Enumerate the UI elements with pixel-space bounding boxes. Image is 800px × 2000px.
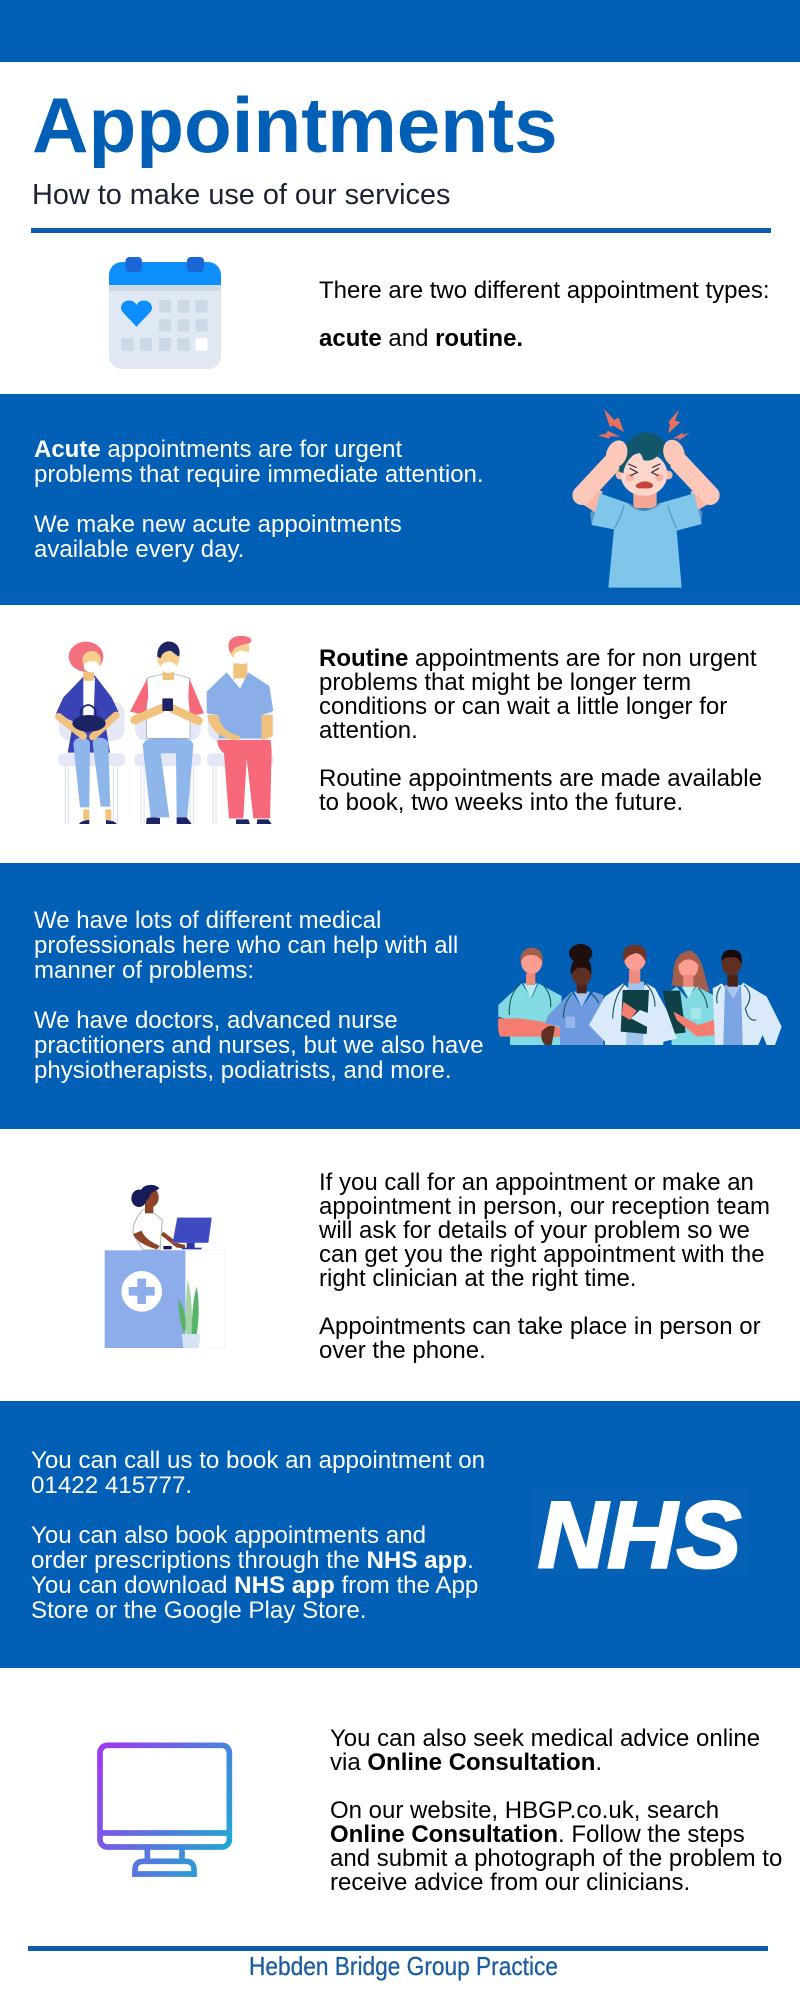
text: routine description: problems that might be longer term xyxy=(319,668,691,696)
top banner xyxy=(0,0,800,62)
subtitle: How to make use of our services xyxy=(32,178,450,210)
text: acute description: problems that require immediate attention. xyxy=(34,460,484,488)
text: routine description xyxy=(319,644,762,816)
text: reception description: over the phone. xyxy=(319,1337,486,1364)
text: online consultation description: receive advice from our clinicians. xyxy=(330,1869,690,1896)
text: booking details: 01422 415777. xyxy=(31,1472,192,1498)
panel: appointment types intro xyxy=(109,257,769,369)
text: online consultation description: via Online Consultation. xyxy=(330,1749,602,1776)
text: booking details: You can also book appointments and xyxy=(31,1522,426,1548)
text: online consultation description: Online Consultation. Follow the steps xyxy=(330,1821,745,1848)
text: staff description xyxy=(34,906,484,1084)
panel: title header xyxy=(31,81,771,233)
text: staff description: manner of problems: xyxy=(34,956,254,984)
panel: online consultation xyxy=(97,1725,782,1896)
text: acute description: Acute appointments are for urgent xyxy=(34,436,402,462)
title: Appointments xyxy=(32,81,558,169)
text: two appointment types xyxy=(319,277,769,352)
figure: man in blue scrubs xyxy=(207,636,273,824)
footer rule xyxy=(28,1946,768,1951)
illustration: five clinicians xyxy=(498,944,782,1045)
figure: nurse with crossed arms xyxy=(498,948,562,1045)
text: online consultation description: On our website, HBGP.co.uk, search xyxy=(330,1797,719,1824)
text: routine description: conditions or can wait a little longer for xyxy=(319,692,727,720)
figure: woman with long hair xyxy=(663,951,719,1045)
text: staff description: We have lots of different medical xyxy=(34,906,381,934)
text: two appointment types: acute and routine. xyxy=(319,325,523,352)
figure: man with phone xyxy=(130,642,204,824)
text: booking details xyxy=(31,1446,485,1624)
text: booking details: order prescriptions through the NHS app. xyxy=(31,1546,474,1574)
text: staff description: professionals here who can help with all xyxy=(34,932,458,958)
panel: reception team xyxy=(104,1169,770,1364)
icon: calendar with heart xyxy=(109,257,221,369)
illustration: person with headache xyxy=(572,409,720,588)
text: routine description: attention. xyxy=(319,716,418,744)
text: booking details: You can call us to book an appointment on xyxy=(31,1446,485,1474)
figure: woman with bag xyxy=(56,642,118,824)
panel: medical professionals xyxy=(0,863,800,1129)
text: online consultation description xyxy=(330,1725,782,1896)
panel: booking by phone and NHS app xyxy=(0,1401,800,1668)
panel: routine appointments xyxy=(55,636,762,824)
text: booking details: Store or the Google Play Store. xyxy=(31,1596,366,1624)
text: reception description: right clinician at the right time. xyxy=(319,1265,636,1292)
text: reception description: Appointments can take place in person or xyxy=(319,1313,761,1340)
footer xyxy=(28,1946,768,1981)
panel: acute appointments xyxy=(0,394,800,605)
text: staff description: We have doctors, advanced nurse xyxy=(34,1006,398,1034)
figure: male doctor with clipboard xyxy=(589,945,677,1045)
illustration: receptionist at desk xyxy=(104,1184,224,1348)
illustration: three patients waiting xyxy=(55,636,274,824)
text: acute description: available every day. xyxy=(34,536,244,562)
text: acute description xyxy=(34,436,484,562)
header rule xyxy=(31,228,771,233)
text: reception description: appointment in person, our reception team xyxy=(319,1193,770,1220)
text: staff description: practitioners and nurses, but we also have xyxy=(34,1032,484,1058)
text: routine description: to book, two weeks into the future. xyxy=(319,788,683,816)
text: reception description: If you call for an appointment or make an xyxy=(319,1169,754,1196)
text: two appointment types: There are two different appointment types: xyxy=(319,277,769,304)
text: online consultation description: and submit a photograph of the problem to xyxy=(330,1845,782,1872)
text: reception description: can get you the right appointment with the xyxy=(319,1241,765,1268)
text: acute description: We make new acute appointments xyxy=(34,510,402,538)
text: online consultation description: You can also seek medical advice online xyxy=(330,1725,760,1752)
text: routine description: Routine appointments are for non urgent xyxy=(319,644,757,672)
figure: nurse with hair bun xyxy=(541,944,603,1045)
icon: computer monitor xyxy=(97,1742,232,1877)
text: reception description xyxy=(319,1169,770,1364)
text: booking details: You can download NHS app from the App xyxy=(31,1572,478,1598)
text: staff description: physiotherapists, podiatrists, and more. xyxy=(34,1056,452,1084)
text: reception description: will ask for details of your problem so we xyxy=(319,1217,750,1244)
text: routine description: Routine appointments are made available xyxy=(319,764,762,792)
figure: doctor in white coat xyxy=(713,950,782,1045)
